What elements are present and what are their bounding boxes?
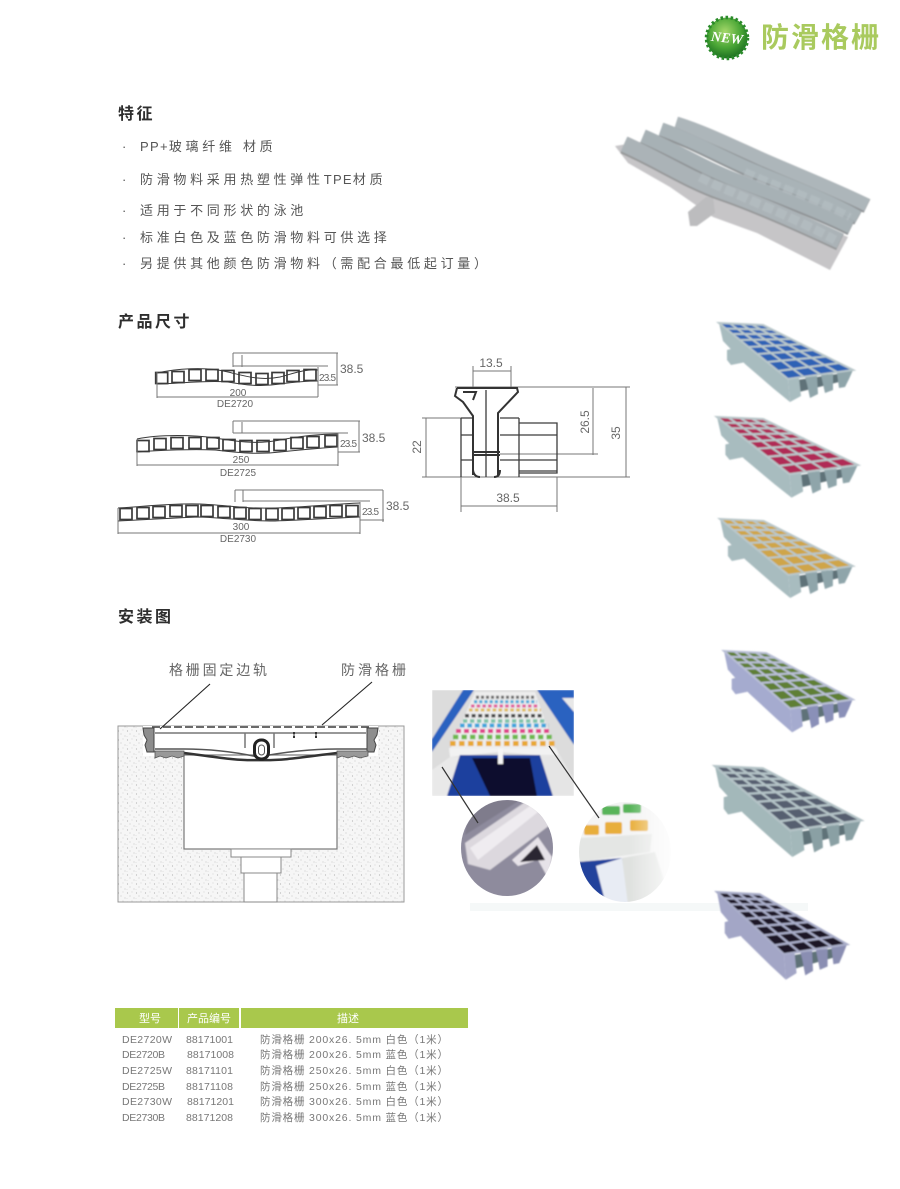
table rows: 防滑格栅 250x26. 5mm 白色（1米） [260,1064,448,1077]
table rows: DE2730B [122,1112,165,1124]
table rows: 防滑格栅 300x26. 5mm 白色（1米） [260,1095,448,1108]
table rows: DE2720B [122,1049,165,1061]
chart: profile DE2725 [137,421,386,479]
chart: profile DE2725: 23.5 [340,439,357,450]
chart: profile DE2730: 38.5 [386,499,410,513]
icon: NEW badge [706,18,748,58]
chart: profile DE2720: 38.5 [340,362,364,376]
text block: feature list: · [122,139,130,154]
text block: feature list: · [122,203,130,218]
label: anti-slip grating: 防滑格栅 [341,662,406,678]
text block: feature list: · [122,256,130,271]
heading: installation: 安装图 [118,608,174,626]
table rows: DE2725B [122,1081,165,1093]
chart: profile DE2720: 23.5 [319,373,336,384]
chart: profile DE2725: 38.5 [362,431,386,445]
label: edge rail: 格栅固定边轨 [169,662,267,678]
text block: feature list: 标准白色及蓝色防滑物料可供选择 [140,230,391,245]
text block: feature list: 防滑物料采用热塑性弹性TPE材质 [140,172,386,187]
table rows: 88171208 [186,1112,233,1124]
text block: feature list: 适用于不同形状的泳池 [140,203,307,218]
diagram: installation cross-section [118,726,404,902]
table rows: 88171001 [186,1034,233,1046]
product: blue grating [719,323,853,402]
product: grey grating [715,766,861,857]
chart: profile DE2730 [118,490,410,545]
table header [115,1008,468,1028]
table header: 描述 [337,1011,359,1025]
table rows: 防滑格栅 300x26. 5mm 蓝色（1米） [260,1111,448,1124]
chart: profile DE2730: DE2730 [220,534,257,545]
arrow: edge rail leader [160,684,210,729]
photo: grating close-up [579,802,663,902]
chart: profile DE2720: 200 [230,388,247,399]
title: 防滑格栅 [761,22,879,53]
table header: 型号 [139,1011,161,1025]
chart: cross-section drawing: 13.5 [479,356,503,370]
chart: cross-section drawing: 22 [410,440,424,454]
table rows: DE2730W [122,1096,172,1108]
chart: profile DE2720 [156,353,364,410]
table rows: 防滑格栅 200x26. 5mm 蓝色（1米） [260,1048,448,1061]
table rows: 防滑格栅 250x26. 5mm 蓝色（1米） [260,1080,448,1093]
table header: 产品编号 [187,1011,231,1025]
heading: features: 特征 [118,104,155,123]
text block: feature list: · [122,230,130,245]
chart: cross-section drawing: 38.5 [496,491,520,505]
product: red grating [717,417,858,498]
product: green grating [724,651,853,732]
photo: installed colourful grating [432,690,574,796]
table rows: 88171101 [186,1065,233,1077]
chart: profile DE2730: 300 [233,522,250,533]
chart: profile DE2720: DE2720 [217,399,254,410]
photo: edge rail close-up [460,798,554,898]
arrow: rail photo leader [442,767,478,823]
table rows [122,1033,448,1124]
chart: profile DE2730: 23.5 [362,507,379,518]
text block: feature list: PP+玻璃纤维 材质 [140,139,276,154]
product photo: grey grating [615,123,867,270]
faint band [470,903,808,911]
arrow: grating photo leader [549,746,599,818]
text block: feature list [122,139,491,271]
icon: NEW badge: NEW [709,30,745,48]
chart: profile DE2725: DE2725 [220,468,257,479]
table rows: 88171008 [187,1049,234,1061]
table rows: 88171201 [187,1096,234,1108]
product: black grating [717,892,847,980]
table rows: DE2720W [122,1034,172,1046]
heading: product dimensions: 产品尺寸 [118,312,192,331]
chart: cross-section drawing: 26.5 [578,410,592,434]
text block: feature list: 另提供其他颜色防滑物料（需配合最低起订量） [140,256,491,271]
table rows: 防滑格栅 200x26. 5mm 白色（1米） [260,1033,448,1046]
arrow: grating leader [322,682,372,725]
table rows: DE2725W [122,1065,172,1077]
product: yellow grating [720,519,853,598]
text block: feature list: · [122,172,130,187]
chart: cross-section drawing: 35 [609,426,623,440]
chart: cross-section drawing [410,356,630,512]
chart: profile DE2725: 250 [233,455,250,466]
table: product codes [115,1008,468,1124]
table rows: 88171108 [186,1081,233,1093]
